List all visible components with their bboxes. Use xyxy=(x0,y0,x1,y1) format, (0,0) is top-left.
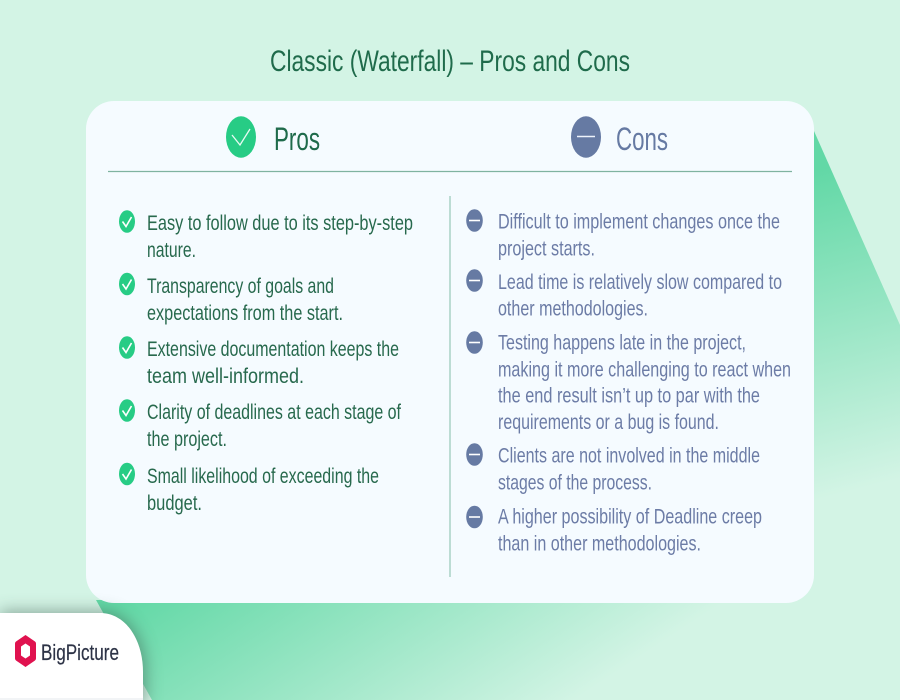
con item 2: Lead time is relatively slow compared to xyxy=(498,271,782,294)
con item 3: Testing happens late in the project, xyxy=(498,332,746,355)
pro item 4: Clarity of deadlines at each stage of xyxy=(147,401,401,424)
icon: BigPicture hexagon xyxy=(15,635,36,667)
pro item 5 xyxy=(119,463,379,515)
pro item 1 xyxy=(119,210,413,262)
pro item 5: budget. xyxy=(147,492,202,515)
pro item 3: Extensive documentation keeps the xyxy=(147,338,399,361)
pro item 3: team well-informed. xyxy=(147,365,304,388)
con item 3: the end result isn’t up to par with the xyxy=(498,385,760,408)
con item 3 xyxy=(466,331,791,434)
panel: main card xyxy=(86,101,814,603)
background accent: bottom green shard xyxy=(96,600,760,700)
pro item 3 xyxy=(119,336,399,388)
con item 1 xyxy=(466,209,780,261)
pro item 2: Transparency of goals and xyxy=(147,275,334,298)
con item 3: requirements or a bug is found. xyxy=(498,411,719,434)
con item 1: Difficult to implement changes once the xyxy=(498,211,780,234)
pro item 2: expectations from the start. xyxy=(147,302,343,325)
con item 4: Clients are not involved in the middle xyxy=(498,445,760,468)
pro item 1: nature. xyxy=(147,239,196,262)
pro item 2 xyxy=(119,273,343,325)
con item 3: making it more challenging to react when xyxy=(498,358,791,382)
background accent: right green shard xyxy=(810,122,900,520)
heading: cons: Cons xyxy=(616,121,668,157)
con item 4 xyxy=(466,443,760,495)
con item 4: stages of the process. xyxy=(498,472,652,495)
panel: pros column xyxy=(119,116,413,515)
pro item 5: Small likelihood of exceeding the xyxy=(147,465,379,488)
pro item 1: Easy to follow due to its step-by-step xyxy=(147,212,413,235)
con item 5 xyxy=(466,506,762,556)
con item 5: than in other methodologies. xyxy=(498,533,701,556)
icon: large check xyxy=(226,116,256,158)
logo wordmark: BigPicture xyxy=(41,640,119,665)
pro item 4: the project. xyxy=(147,428,227,451)
icon: large minus xyxy=(571,116,601,158)
pro item 4 xyxy=(119,399,401,451)
con item 5: A higher possibility of Deadline creep xyxy=(498,506,762,529)
title: Classic (Waterfall) – Pros and Cons xyxy=(270,45,630,78)
con item 1: project starts. xyxy=(498,238,595,261)
logo card shadow xyxy=(0,611,146,700)
panel: cons column xyxy=(466,116,791,556)
con item 2 xyxy=(466,269,782,321)
heading: pros: Pros xyxy=(274,121,320,157)
con item 2: other methodologies. xyxy=(498,298,648,321)
logo card xyxy=(0,613,143,700)
